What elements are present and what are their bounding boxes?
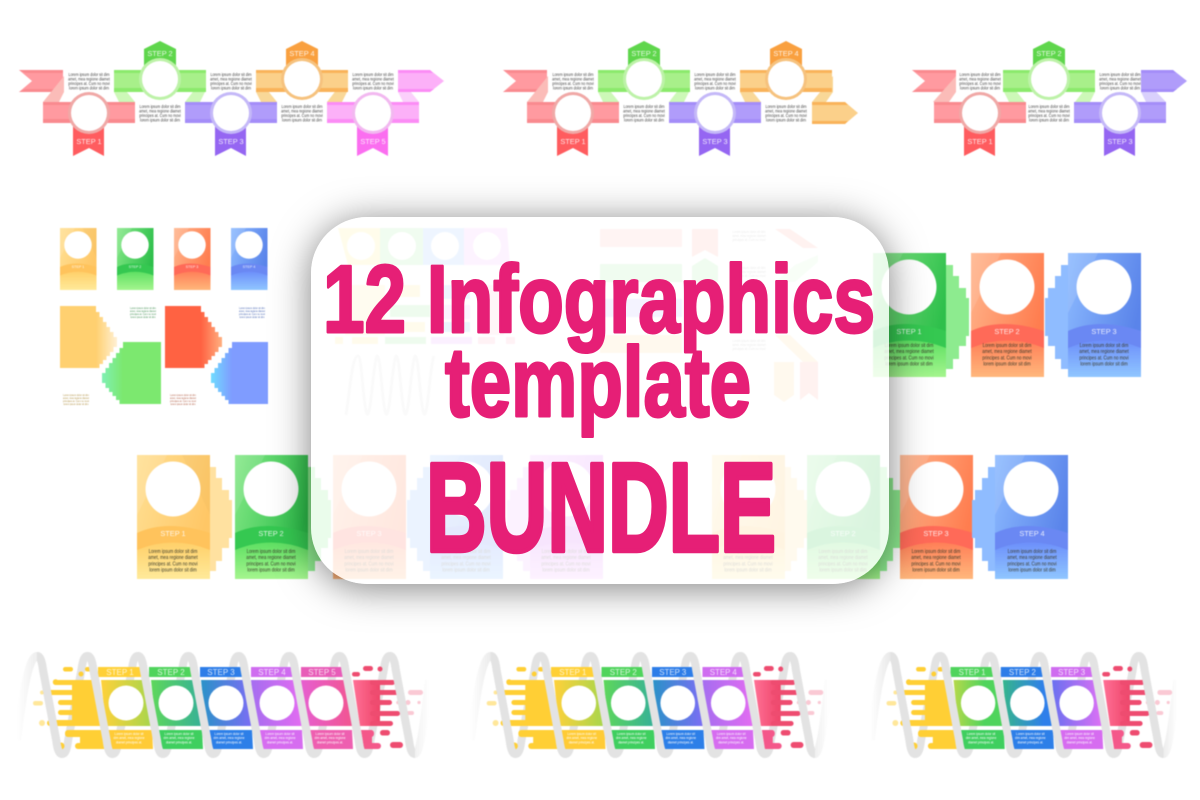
small card 1 yellow bbox=[60, 228, 96, 290]
ribbon text blocks: amet, mea regione diamet bbox=[694, 76, 737, 82]
card step 2 green: Lorem ipsum dolor sit dim bbox=[247, 549, 295, 555]
card step 4 blue: amet, mea regione diamet bbox=[1007, 555, 1057, 561]
ribbon text blocks: lorem ipsum dolor sit dim bbox=[69, 85, 109, 91]
pink splash right bbox=[1102, 666, 1172, 749]
panel step 2: dim amet, mea regione bbox=[164, 736, 195, 740]
ribbon text blocks: Lorem ipsum dolor sit dim bbox=[623, 104, 665, 109]
panel step 2: STEP 2 bbox=[1009, 668, 1037, 677]
panel step 4: dim amet, mea regione bbox=[265, 736, 296, 740]
small card 2 green: STEP 2 bbox=[129, 265, 141, 269]
card step 4 blue: Lorem ipsum dolor sit dim bbox=[1008, 549, 1056, 555]
panel step 4: Lorem ipsum dolor sit bbox=[717, 732, 746, 736]
small card 4 blue: STEP 4 bbox=[243, 265, 255, 269]
step 3 purple bbox=[185, 92, 277, 156]
card step 3 blue bbox=[1045, 253, 1141, 377]
card step 3 orange: STEP 3 bbox=[923, 529, 949, 538]
ribbon text blocks: lorem ipsum dolor sit dim bbox=[1100, 85, 1140, 91]
step panels bbox=[551, 667, 755, 749]
faded card orange: Lorem ipsum dolor sit dim bbox=[345, 549, 393, 555]
panel step 3: STEP 3 bbox=[659, 668, 687, 677]
panel step 3: diamet principes at. bbox=[668, 740, 694, 745]
faded circle strip bbox=[338, 228, 510, 265]
block red bbox=[165, 306, 222, 368]
panel step 2: diamet principes at. bbox=[1017, 740, 1043, 745]
faded text lines: principes at. Cum no movi bbox=[732, 238, 766, 242]
faded card blue bbox=[407, 455, 503, 579]
step 1 red bbox=[934, 92, 1026, 156]
step 3 purple bbox=[669, 92, 761, 156]
panel step 2: Lorem ipsum dolor sit bbox=[1016, 732, 1045, 736]
panel step 1: STEP 1 bbox=[106, 668, 134, 677]
panel step 2: dim amet, mea regione bbox=[1015, 736, 1046, 740]
block captions: principes at. Cum no movi bbox=[170, 399, 196, 403]
card step 2 orange bbox=[971, 253, 1044, 377]
ribbon text blocks: principes at. Cum no movi bbox=[694, 81, 736, 86]
panel step 3: Lorem ipsum dolor sit bbox=[215, 732, 244, 736]
panel step 2: diamet principes at. bbox=[618, 740, 644, 745]
ribbon text blocks: Lorem ipsum dolor sit dim bbox=[1099, 72, 1141, 77]
ribbon text blocks: Lorem ipsum dolor sit dim bbox=[352, 72, 394, 77]
ribbon text blocks: amet, mea regione diamet bbox=[1099, 76, 1142, 82]
step 4 orange bbox=[740, 41, 832, 100]
faded card blue: lorem ipsum dolor sit dim bbox=[442, 567, 490, 574]
step 3 purple: STEP 3 bbox=[218, 137, 244, 146]
card step 1 yellow: principes at. Cum no movi bbox=[148, 561, 198, 568]
card step 3 orange bbox=[900, 455, 973, 579]
ribbon text blocks: principes at. Cum no movi bbox=[959, 81, 1001, 86]
faded card yellow: lorem ipsum dolor sit dim bbox=[724, 567, 772, 574]
ribbon text blocks: amet, mea regione diamet bbox=[765, 108, 808, 114]
ribbon text blocks: amet, mea regione diamet bbox=[1028, 108, 1071, 114]
block captions: lorem ipsum dolor sit dim bbox=[171, 402, 196, 406]
faded card green: principes at. Cum no movi bbox=[818, 561, 868, 568]
step 1 red: STEP 1 bbox=[967, 137, 993, 146]
faded card yellow bbox=[712, 455, 807, 579]
stepped arrow blocks bbox=[60, 306, 268, 406]
ribbon text blocks bbox=[552, 72, 808, 123]
panel step 1: Lorem ipsum dolor sit bbox=[967, 732, 995, 736]
small card 1 yellow: STEP 1 bbox=[72, 265, 84, 269]
panel step 4: dim amet, mea regione bbox=[716, 736, 747, 740]
card step 1 yellow: STEP 1 bbox=[160, 529, 186, 538]
small card 4 blue bbox=[231, 228, 268, 290]
faded card orange bbox=[333, 455, 406, 579]
panel step 4: Lorem ipsum dolor sit bbox=[266, 732, 295, 736]
panel step 1: dim amet, mea regione bbox=[566, 736, 597, 740]
ribbon text blocks: principes at. Cum no movi bbox=[352, 81, 394, 86]
panel step 3: STEP 3 bbox=[207, 668, 235, 677]
panel step 4: STEP 4 bbox=[710, 668, 737, 677]
panel step 1 bbox=[551, 667, 605, 749]
ribbon text blocks: Lorem ipsum dolor sit dim bbox=[552, 72, 594, 77]
card step 3 blue: lorem ipsum dolor sit dim bbox=[1080, 361, 1128, 368]
step 1 red bbox=[43, 92, 135, 156]
block captions: Lorem ipsum dolor sit dim bbox=[170, 393, 197, 397]
ribbon text blocks: lorem ipsum dolor sit dim bbox=[553, 85, 593, 91]
faded card orange: amet, mea regione diamet bbox=[344, 555, 394, 561]
yellow splash left bbox=[33, 667, 105, 750]
ribbon text blocks: principes at. Cum no movi bbox=[623, 113, 665, 118]
ribbon text blocks: principes at. Cum no movi bbox=[765, 113, 807, 118]
card step 1 yellow bbox=[137, 455, 232, 579]
ribbon text blocks: principes at. Cum no movi bbox=[139, 113, 181, 118]
block captions: amet, mea regione diamet bbox=[170, 396, 196, 400]
block captions: lorem ipsum dolor sit dim bbox=[240, 315, 265, 319]
spring infographic: four steps bbox=[471, 656, 829, 754]
faded ribbon tabs bbox=[692, 229, 818, 402]
step 2 green bbox=[1003, 41, 1095, 100]
block blue bbox=[211, 342, 268, 404]
card step 3 blue: STEP 3 bbox=[1091, 327, 1117, 336]
ribbon text blocks: lorem ipsum dolor sit dim bbox=[695, 85, 735, 91]
card step 3 orange: amet, mea regione diamet bbox=[911, 555, 961, 561]
ribbon text blocks: amet, mea regione diamet bbox=[281, 108, 324, 114]
block captions: Lorem ipsum dolor sit dim bbox=[239, 306, 266, 310]
block captions: principes at. Cum no movi bbox=[130, 312, 156, 316]
step 1 red bbox=[527, 92, 619, 156]
step 4 orange: STEP 4 bbox=[773, 49, 799, 58]
panel step 5: dim amet, mea regione bbox=[315, 736, 346, 740]
faded card purple bbox=[507, 455, 603, 579]
card step 2 orange: lorem ipsum dolor sit dim bbox=[983, 361, 1031, 368]
ribbon text blocks: lorem ipsum dolor sit dim bbox=[282, 117, 322, 123]
step 3 purple: STEP 3 bbox=[1107, 137, 1133, 146]
faded card blue: amet, mea regione diamet bbox=[441, 555, 491, 561]
panel step 5: STEP 5 bbox=[308, 668, 336, 677]
card step 3 blue: principes at. Cum no movi bbox=[1079, 355, 1129, 362]
card step 4 blue: lorem ipsum dolor sit dim bbox=[1008, 567, 1056, 574]
step panels bbox=[951, 667, 1103, 749]
faded card purple: amet, mea regione diamet bbox=[541, 555, 591, 561]
yellow splash left bbox=[887, 667, 957, 750]
panel step 3: STEP 3 bbox=[1058, 668, 1086, 677]
ribbon text blocks: principes at. Cum no movi bbox=[552, 81, 594, 86]
ribbon text blocks: principes at. Cum no movi bbox=[1028, 113, 1070, 118]
ribbon text blocks: lorem ipsum dolor sit dim bbox=[353, 85, 393, 91]
ribbon text blocks: Lorem ipsum dolor sit dim bbox=[1028, 104, 1070, 109]
step 4 orange bbox=[256, 41, 348, 100]
panel step 2 bbox=[1001, 667, 1054, 749]
step 2 green bbox=[114, 41, 206, 100]
panel step 3 bbox=[200, 667, 253, 749]
faded card green: STEP 2 bbox=[830, 529, 856, 538]
panel step 4: STEP 4 bbox=[258, 668, 286, 677]
faded card purple: Lorem ipsum dolor sit dim bbox=[542, 549, 590, 555]
panel step 1: diamet principes at. bbox=[968, 740, 994, 745]
spring infographic: five steps bbox=[17, 656, 429, 754]
panel step 3: Lorem ipsum dolor sit bbox=[1065, 732, 1094, 736]
faded labels bbox=[335, 337, 515, 344]
panel step 3: dim amet, mea regione bbox=[665, 736, 696, 740]
step 5 pink: STEP 5 bbox=[360, 137, 386, 146]
block captions: principes at. Cum no movi bbox=[239, 312, 265, 316]
panel step 2 bbox=[149, 667, 203, 749]
faded card green: Lorem ipsum dolor sit dim bbox=[819, 549, 867, 555]
step 2 green: STEP 2 bbox=[147, 49, 173, 58]
ribbon text blocks: amet, mea regione diamet bbox=[139, 108, 182, 114]
small card 2 green bbox=[117, 228, 154, 290]
card step 2 green: amet, mea regione diamet bbox=[246, 555, 296, 561]
faded card orange: lorem ipsum dolor sit dim bbox=[345, 567, 393, 574]
ribbon text blocks: amet, mea regione diamet bbox=[352, 76, 395, 82]
panel step 3: dim amet, mea regione bbox=[214, 736, 245, 740]
card step 2 green: principes at. Cum no movi bbox=[246, 561, 296, 568]
card step 2 orange: principes at. Cum no movi bbox=[982, 355, 1032, 362]
panel step 1: STEP 1 bbox=[959, 668, 986, 677]
faded card yellow: Lorem ipsum dolor sit dim bbox=[724, 549, 772, 555]
faded text lines: Lorem ipsum dolor sit dim bbox=[733, 230, 766, 234]
panel step 1: dim amet, mea regione bbox=[114, 736, 145, 740]
block captions: amet, mea regione diamet bbox=[63, 396, 89, 400]
faded card yellow: amet, mea regione diamet bbox=[723, 555, 773, 561]
step panels bbox=[98, 667, 353, 749]
faded card green: amet, mea regione diamet bbox=[818, 555, 868, 561]
card step 2 orange: STEP 2 bbox=[994, 327, 1020, 336]
pink splash right bbox=[753, 666, 823, 749]
panel step 4: diamet principes at. bbox=[718, 740, 744, 745]
ribbon text blocks: Lorem ipsum dolor sit dim bbox=[210, 72, 252, 77]
card step 1 green: lorem ipsum dolor sit dim bbox=[885, 361, 933, 368]
card step 4 blue bbox=[972, 455, 1068, 579]
ribbon text blocks: principes at. Cum no movi bbox=[210, 81, 252, 86]
title: 12 Infographics template BUNDLE: template bbox=[445, 327, 751, 437]
ribbon folds bbox=[43, 76, 419, 102]
spring front legs bbox=[37, 656, 415, 754]
arrow: purple end bbox=[1141, 70, 1187, 92]
faded text lines bbox=[732, 230, 766, 351]
ribbon text blocks: amet, mea regione diamet bbox=[552, 76, 595, 82]
panel step 1: diamet principes at. bbox=[116, 740, 142, 745]
pink splash right bbox=[352, 666, 423, 749]
ribbon text blocks: Lorem ipsum dolor sit dim bbox=[281, 104, 323, 109]
panel step 3: diamet principes at. bbox=[216, 740, 242, 745]
card step 3 orange: principes at. Cum no movi bbox=[911, 561, 961, 568]
card step 3 orange: lorem ipsum dolor sit dim bbox=[912, 567, 960, 574]
spring infographic: three steps bbox=[871, 656, 1177, 754]
faded infographics behind the title card bbox=[335, 228, 818, 415]
spring back coil bbox=[471, 656, 829, 754]
panel step 2: STEP 2 bbox=[157, 668, 185, 677]
faded text lines: amet, mea regione diamet bbox=[732, 270, 766, 274]
card step 2 green bbox=[235, 455, 331, 579]
faded wave bbox=[346, 356, 434, 415]
ribbon text blocks: lorem ipsum dolor sit dim bbox=[1029, 117, 1069, 123]
card step 3 blue: Lorem ipsum dolor sit dim bbox=[1080, 343, 1128, 349]
card step 1 green: Lorem ipsum dolor sit dim bbox=[885, 343, 933, 349]
spring front legs bbox=[890, 656, 1163, 754]
step 2 green: STEP 2 bbox=[1036, 49, 1062, 58]
ribbon text blocks: principes at. Cum no movi bbox=[1099, 81, 1141, 86]
title: 12 Infographics template BUNDLE: BUNDLE bbox=[426, 437, 776, 578]
ribbon text blocks: amet, mea regione diamet bbox=[68, 76, 111, 82]
block captions: lorem ipsum dolor sit dim bbox=[131, 315, 156, 319]
ribbon folds bbox=[527, 76, 833, 102]
ribbon text blocks bbox=[959, 72, 1142, 123]
faded text lines: principes at. Cum no movi bbox=[732, 347, 766, 351]
small card 3 orange bbox=[174, 228, 210, 290]
faded text lines: Lorem ipsum dolor sit dim bbox=[733, 339, 766, 343]
panel step 3: diamet principes at. bbox=[1067, 740, 1093, 745]
card step 1 yellow: Lorem ipsum dolor sit dim bbox=[149, 549, 197, 555]
panel step 5: diamet principes at. bbox=[317, 740, 343, 745]
ribbon folds bbox=[933, 76, 1166, 102]
card step 2 green: lorem ipsum dolor sit dim bbox=[247, 567, 295, 574]
panel step 3: Lorem ipsum dolor sit bbox=[666, 732, 695, 736]
card step 4 blue: principes at. Cum no movi bbox=[1007, 561, 1057, 568]
panel step 2 bbox=[602, 667, 655, 749]
block captions: principes at. Cum no movi bbox=[63, 399, 89, 403]
step 4 orange: STEP 4 bbox=[289, 49, 315, 58]
faded card purple: lorem ipsum dolor sit dim bbox=[542, 567, 590, 574]
ribbon text blocks: lorem ipsum dolor sit dim bbox=[624, 117, 664, 123]
step 1 red: STEP 1 bbox=[560, 137, 586, 146]
panel step 2: diamet principes at. bbox=[166, 740, 192, 745]
faded text lines: Lorem ipsum dolor sit dim bbox=[733, 266, 766, 270]
spring back coil bbox=[871, 656, 1177, 754]
faded card orange: principes at. Cum no movi bbox=[344, 561, 394, 568]
panel step 5: Lorem ipsum dolor sit bbox=[316, 732, 345, 736]
ribbon text blocks: lorem ipsum dolor sit dim bbox=[960, 85, 1000, 91]
block captions: lorem ipsum dolor sit dim bbox=[64, 402, 89, 406]
card step 1 green: amet, mea regione diamet bbox=[884, 349, 934, 355]
title: 12 Infographics template BUNDLE: 12 Infographics bbox=[323, 246, 875, 353]
ribbon text blocks: lorem ipsum dolor sit dim bbox=[140, 117, 180, 123]
panel step 1: dim amet, mea regione bbox=[966, 736, 996, 740]
arrow: orange end bbox=[812, 102, 858, 124]
small card 3 orange: STEP 3 bbox=[186, 265, 198, 269]
panel step 1 bbox=[951, 667, 1005, 749]
panel step 5 bbox=[301, 667, 353, 749]
card step 2 orange: amet, mea regione diamet bbox=[982, 349, 1032, 355]
title card panel bbox=[311, 217, 889, 584]
ribbon text blocks: amet, mea regione diamet bbox=[623, 108, 666, 114]
faded coloured blocks bbox=[345, 285, 504, 335]
ribbon infographic: three steps bbox=[912, 41, 1187, 156]
small gradient cards: four steps bbox=[60, 228, 268, 290]
step 2 green bbox=[598, 41, 690, 100]
ribbon text blocks: Lorem ipsum dolor sit dim bbox=[68, 72, 110, 77]
step 3 purple: STEP 3 bbox=[702, 137, 728, 146]
panel step 4 bbox=[251, 667, 304, 749]
panel step 2: Lorem ipsum dolor sit bbox=[165, 732, 194, 736]
ribbon text blocks: amet, mea regione diamet bbox=[210, 76, 253, 82]
panel step 1 bbox=[98, 667, 153, 749]
faded card green: lorem ipsum dolor sit dim bbox=[819, 567, 867, 574]
flag: red start bbox=[19, 70, 63, 92]
block captions: amet, mea regione diamet bbox=[239, 309, 265, 313]
panel step 4: diamet principes at. bbox=[267, 740, 293, 745]
card step 4 blue: STEP 4 bbox=[1019, 529, 1045, 538]
ribbon text blocks: Lorem ipsum dolor sit dim bbox=[139, 104, 181, 109]
tall cards row: right of title bbox=[873, 253, 1141, 377]
faded text lines: principes at. Cum no movi bbox=[732, 274, 766, 278]
faded text lines: amet, mea regione diamet bbox=[732, 343, 766, 347]
ribbon text blocks: amet, mea regione diamet bbox=[959, 76, 1002, 82]
step 1 red: STEP 1 bbox=[76, 137, 102, 146]
panel step 3: dim amet, mea regione bbox=[1064, 736, 1095, 740]
card step 1 green: STEP 1 bbox=[896, 327, 922, 336]
faded card blue: principes at. Cum no movi bbox=[441, 561, 491, 568]
card step 2 orange: Lorem ipsum dolor sit dim bbox=[983, 343, 1031, 349]
tall cards row: middle band bbox=[137, 455, 1068, 579]
step 3 purple bbox=[1074, 92, 1166, 156]
faded card purple: principes at. Cum no movi bbox=[541, 561, 591, 568]
card step 1 yellow: amet, mea regione diamet bbox=[148, 555, 198, 561]
flag: red start bbox=[912, 70, 956, 92]
block yellow bbox=[60, 306, 117, 368]
ribbon text blocks: lorem ipsum dolor sit dim bbox=[766, 117, 806, 123]
step 5 pink bbox=[327, 92, 419, 156]
block captions bbox=[63, 306, 266, 406]
step 2 green: STEP 2 bbox=[631, 49, 657, 58]
ribbon text blocks bbox=[68, 72, 395, 123]
panel step 1: Lorem ipsum dolor sit bbox=[567, 732, 596, 736]
panel step 1: Lorem ipsum dolor sit bbox=[115, 732, 144, 736]
ribbon text blocks: lorem ipsum dolor sit dim bbox=[211, 85, 251, 91]
block captions: Lorem ipsum dolor sit dim bbox=[63, 393, 90, 397]
card step 1 yellow: lorem ipsum dolor sit dim bbox=[149, 567, 197, 574]
panel step 4 bbox=[702, 667, 755, 749]
block green bbox=[102, 342, 161, 404]
ribbon text blocks: principes at. Cum no movi bbox=[281, 113, 323, 118]
panel step 2: STEP 2 bbox=[610, 668, 637, 677]
ribbon text blocks: Lorem ipsum dolor sit dim bbox=[959, 72, 1001, 77]
faded card blue: Lorem ipsum dolor sit dim bbox=[442, 549, 490, 555]
panel step 2: Lorem ipsum dolor sit bbox=[617, 732, 646, 736]
panel step 1: diamet principes at. bbox=[569, 740, 595, 745]
yellow splash left bbox=[487, 667, 558, 750]
faded text lines: amet, mea regione diamet bbox=[732, 234, 766, 238]
faded ribbon bars bbox=[600, 229, 682, 353]
arrow: pink end bbox=[398, 70, 444, 92]
spring front legs bbox=[491, 656, 815, 754]
block captions: amet, mea regione diamet bbox=[130, 309, 156, 313]
faded card green bbox=[807, 455, 903, 579]
faded card orange: STEP 3 bbox=[356, 529, 382, 538]
card step 1 green: principes at. Cum no movi bbox=[884, 355, 934, 362]
ribbon infographic: four steps bbox=[503, 41, 858, 156]
panel step 3 bbox=[652, 667, 704, 749]
spring back coil bbox=[17, 656, 429, 754]
panel step 1: STEP 1 bbox=[559, 668, 587, 677]
flag: red start bbox=[503, 70, 547, 92]
card step 3 blue: amet, mea regione diamet bbox=[1079, 349, 1129, 355]
faded card yellow: principes at. Cum no movi bbox=[723, 561, 773, 568]
ribbon infographic: five steps bbox=[19, 41, 444, 156]
ribbon text blocks: Lorem ipsum dolor sit dim bbox=[765, 104, 807, 109]
card step 3 orange: Lorem ipsum dolor sit dim bbox=[912, 549, 960, 555]
ribbon text blocks: Lorem ipsum dolor sit dim bbox=[694, 72, 736, 77]
card step 2 green: STEP 2 bbox=[258, 529, 284, 538]
panel step 3 bbox=[1051, 667, 1103, 749]
ribbon text blocks: principes at. Cum no movi bbox=[68, 81, 110, 86]
card step 1 green bbox=[873, 253, 969, 377]
block captions: Lorem ipsum dolor sit dim bbox=[130, 306, 157, 310]
panel step 2: dim amet, mea regione bbox=[616, 736, 647, 740]
